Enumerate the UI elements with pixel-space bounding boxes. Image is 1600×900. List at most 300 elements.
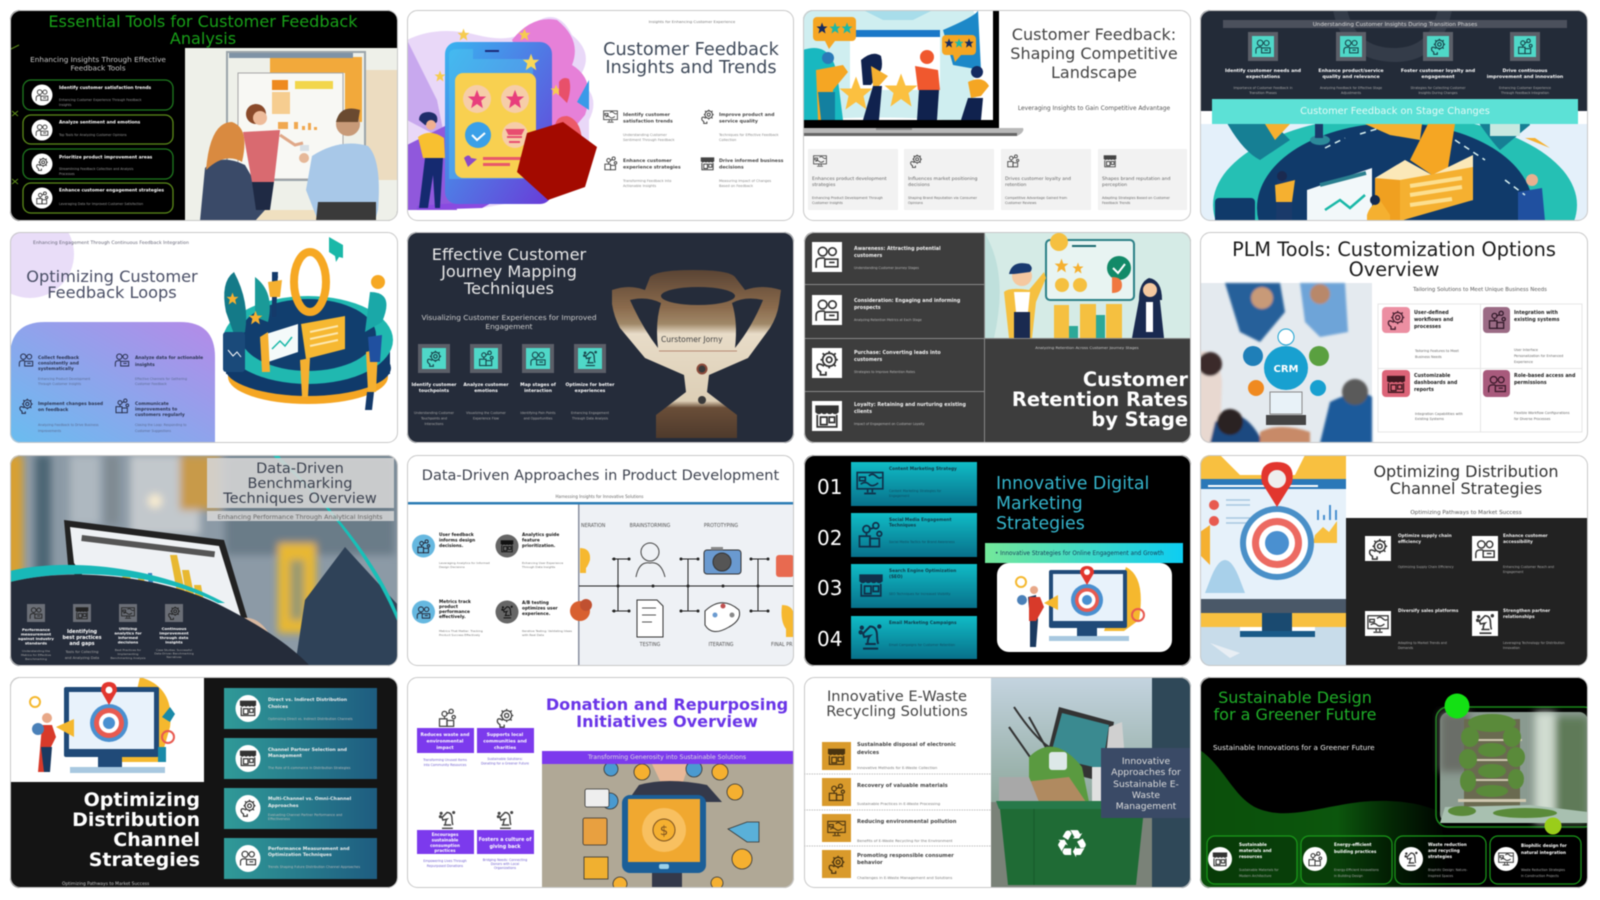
stage: purchase: Strategies to Improve Retention Rates	[854, 370, 915, 374]
title: by Stage	[1091, 408, 1188, 431]
card: sentiment and emotions: Top Tools for Analyzing Customer Opinions	[58, 133, 127, 137]
option: workflows: processes	[1414, 324, 1441, 330]
card: customer loyalty: Customer Reviews	[1005, 201, 1037, 205]
title: Initiatives Overview	[576, 712, 758, 731]
stage: awareness: Understanding Customer Journey Stages	[854, 266, 919, 270]
approach: A/B testing: with Real Data	[522, 633, 544, 637]
gradient panel with actions: insights	[135, 362, 155, 368]
dark options panel: Demands	[1398, 646, 1414, 650]
card: biophilic: in Construction Projects	[1521, 874, 1559, 878]
panel: Innovative Digital Marketing Strategies	[804, 455, 1192, 666]
callout box	[1101, 748, 1191, 818]
solution: consumer behavior: behavior	[857, 860, 883, 866]
title: for a Greener Future	[1214, 705, 1376, 724]
card: product development: Customer Insights	[812, 201, 843, 205]
card: materials: Modern Architecture	[1239, 874, 1272, 878]
metric: performance: Metrics for Effective	[21, 653, 51, 657]
item 01: Content Marketing Strategy	[889, 466, 957, 472]
step: product quality: Enhance product/service	[1318, 69, 1384, 74]
title box: Techniques Overview	[222, 491, 377, 507]
subtitle: Harnessing Insights for Innovative Solutions	[555, 494, 644, 499]
approach: metrics: Metrics track	[439, 600, 471, 605]
card: direct vs indirect: Optimizing Direct vs. Indirect Distribution Channels	[268, 717, 353, 721]
item 01	[817, 462, 977, 506]
callout box: Management	[1116, 801, 1177, 812]
card: customer loyalty: Drives customer loyalty and	[1005, 177, 1071, 182]
metric: improvement: Continuous	[162, 626, 186, 631]
approach: user feedback	[412, 532, 490, 569]
subtitle box: Enhancing Performance Through Analytical Insights	[218, 513, 383, 521]
metric: analytics	[110, 604, 146, 660]
title: Innovative E-Waste	[827, 688, 967, 705]
title: Feedback Loops	[47, 283, 177, 302]
metric: analytics: Best Practices for	[115, 648, 141, 652]
subtitle: Optimizing Pathways to Market Success	[1410, 510, 1522, 516]
feature: service quality: Techniques for Effective Feedback	[719, 133, 779, 137]
panel: Data-Driven Approaches in Product Development	[407, 455, 795, 666]
title: Overview	[1349, 258, 1439, 281]
dark options panel: Engagement	[1503, 570, 1524, 574]
callout box: Waste	[1132, 790, 1160, 801]
option: workflows	[1382, 307, 1459, 359]
title: Insights and Trends	[605, 58, 777, 78]
card: multi-channel: Multi-Channel vs. Omni-Channel	[268, 797, 351, 802]
card: direct vs indirect: Choices	[268, 704, 288, 710]
solution: disposal: devices	[857, 750, 879, 756]
step: customer needs: Transition Phases	[1248, 91, 1277, 95]
initiative: support communities: Sustainable Solutions:	[487, 757, 523, 761]
item 02: Social Media Engagement	[889, 518, 952, 523]
card: energy	[1301, 836, 1392, 884]
callout box: Approaches for	[1111, 767, 1181, 778]
card: waste	[1395, 836, 1486, 884]
approach: analytics	[496, 532, 563, 569]
metric: performance: Performance	[22, 627, 50, 632]
trophy photo cutout	[612, 270, 781, 438]
metric: performance	[18, 604, 54, 661]
stage: awareness	[812, 242, 941, 272]
item 02: Social Media Tactics for Brand Awareness	[889, 540, 955, 544]
metric: improvement: Case Studies: Successful	[156, 648, 192, 652]
card: biophilic: natural integration	[1521, 850, 1566, 855]
title: Data-Driven Approaches in Product Development	[422, 468, 780, 484]
card: biophilic	[1490, 836, 1581, 884]
feature: business decisions	[701, 158, 784, 188]
dark options panel: Optimizing Supply Chain Efficiency	[1398, 565, 1454, 569]
solution: recovery: Recovery of valuable materials	[857, 783, 948, 789]
panel: Customer Feedback Shaping Competitive Landscape	[803, 10, 1191, 221]
feature: business decisions: Drive informed business	[719, 159, 783, 164]
illustration: analysts and dashboard	[984, 232, 1191, 338]
trophy photo cutout: Curstomer Jorny	[661, 335, 723, 344]
metric: analytics: informed	[118, 635, 138, 640]
panel: Effective Customer Journey Mapping Techniques	[407, 232, 795, 443]
item 04	[817, 616, 977, 659]
photo: CRM meeting: CRM	[1274, 364, 1299, 375]
gradient panel with actions	[10, 322, 215, 443]
card: materials: Sustainable	[1239, 842, 1267, 847]
dark options panel: relationships	[1503, 614, 1535, 620]
feature: service quality	[702, 110, 780, 142]
gradient panel with actions: customers regularly	[135, 412, 185, 418]
stage: consideration: Consideration: Engaging and informing	[854, 299, 960, 304]
title box: Benchmarking	[247, 476, 353, 492]
dark options panel: Enhance customer	[1503, 534, 1548, 539]
card: direct vs indirect	[224, 688, 377, 729]
title: Analysis	[170, 29, 236, 48]
card: channel partner: Channel Partner Selection and	[268, 748, 347, 753]
solution: disposal: Innovative Methods for E-Waste Collection	[857, 765, 938, 770]
option: dashboards	[1382, 370, 1463, 421]
metric: improvement: insights	[165, 640, 183, 644]
step: customer loyalty: Strategies for Collecting Customer	[1410, 86, 1466, 90]
card: brand reputation	[1098, 149, 1187, 210]
callout box: Sustainable E-	[1113, 779, 1179, 790]
initiative: sustainable consumption: sustainable	[432, 838, 459, 842]
initiative: support communities	[477, 709, 534, 766]
title band: Customer Feedback on Stage Changes	[1300, 106, 1490, 117]
card: customer engagement: Enhance customer engagement strategies	[59, 188, 164, 194]
solution: pollution	[822, 814, 957, 843]
initiative: reduce waste: impact	[436, 745, 455, 751]
initiative: sustainable consumption: Repurposed Donations	[427, 864, 463, 868]
header strip	[1223, 20, 1567, 28]
callout band	[985, 543, 1183, 563]
card: satisfaction trends: Enhancing Customer Experience Through Feedback	[59, 98, 141, 102]
option: workflows: Tailoring Features to Meet	[1415, 349, 1459, 353]
metric: best practices: and Analyzing Data	[65, 656, 99, 660]
metric: improvement: Narratives	[167, 655, 182, 659]
process diagram: TESTING	[639, 642, 661, 648]
metric: analytics: decisions	[118, 640, 139, 644]
initiative: culture of giving: Donors with Local	[491, 862, 519, 866]
card: multi-channel: Evaluating Channel Partner Performance and	[268, 813, 342, 817]
gradient panel with actions: on feedback	[38, 407, 68, 413]
dark options panel: Leveraging Technology for Distribution	[1503, 641, 1565, 645]
step: product quality: Adjustments	[1341, 91, 1361, 95]
stage: awareness: Awareness: Attracting potential	[854, 247, 941, 252]
feature: service quality: service quality	[719, 118, 758, 124]
metric: performance: Benchmarking	[25, 657, 47, 661]
card: performance measurement: Optimization Techniques	[268, 852, 332, 858]
step: touchpoints: touchpoints	[419, 388, 449, 394]
title: Retention Rates	[1012, 388, 1188, 411]
stage: consideration: prospects	[854, 305, 881, 311]
panel: Optimizing Customer Feedback Loops	[10, 232, 394, 444]
title: Essential Tools for Customer Feedback	[48, 12, 358, 31]
approach: analytics: Through Data Insights	[521, 565, 556, 569]
initiative: reduce waste: into Community Resources	[424, 763, 467, 767]
panel: PLM Tools Customization Options Overview	[1198, 232, 1588, 443]
photo: tablet in warehouse	[5, 455, 398, 666]
title: PLM Tools: Customization Options	[1232, 238, 1556, 261]
callout box: Innovative	[1122, 756, 1170, 767]
card: materials: resources	[1239, 854, 1263, 859]
solution: consumer behavior	[822, 850, 954, 880]
step: customer needs: Importance of Customer Feedback in	[1234, 86, 1292, 90]
stage: loyalty	[812, 401, 966, 431]
option: workflows: User-defined	[1414, 311, 1449, 316]
approach: user feedback: User feedback	[439, 533, 474, 538]
step: product quality: Analyzing Feedback for Effective Stage	[1320, 86, 1382, 90]
item 02	[817, 513, 977, 557]
step: touchpoints	[411, 344, 457, 426]
card: biophilic: Waste Reduction Strategies	[1521, 868, 1565, 872]
option: integration: Integration with	[1514, 311, 1558, 316]
approach: metrics	[412, 599, 483, 637]
subtitle: Leveraging Insights to Gain Competitive Advantage	[1018, 106, 1170, 112]
initiative: culture of giving: Bridging Needs: Connecting	[483, 858, 527, 862]
title: Channel	[113, 829, 200, 851]
title: Customer Feedback	[603, 40, 779, 60]
stage: consideration	[812, 295, 961, 325]
stage: purchase: customers	[854, 357, 882, 363]
metric: best practices: best practices	[62, 635, 102, 641]
title: Effective Customer	[432, 245, 586, 264]
gradient panel with actions: Collect feedback	[38, 356, 79, 361]
dark options panel: Optimize supply chain	[1398, 534, 1452, 539]
title band	[1212, 99, 1578, 124]
card: sentiment and emotions: Analyze sentiment and emotions	[59, 120, 141, 126]
option: access: Role-based access and	[1514, 374, 1575, 379]
option: workflows: workflows and	[1414, 317, 1454, 323]
card: product improvement	[23, 149, 173, 179]
stage: consideration: Analyzing Retention Metrics at Each Stage	[854, 318, 922, 322]
option: workflows: Business Needs	[1415, 355, 1442, 359]
option: integration: Experience	[1514, 360, 1533, 364]
approach: user feedback: informs design	[439, 538, 475, 544]
approach: A/B testing: optimizes user	[522, 606, 559, 612]
gradient panel with actions: Implement changes based	[38, 402, 103, 407]
feature: satisfaction trends	[604, 111, 675, 142]
stage: loyalty: clients	[854, 409, 872, 415]
step: customer needs: expectations	[1246, 74, 1280, 80]
feature: satisfaction trends: Sentiment Through Feedback	[623, 138, 675, 142]
item 04: 04	[817, 627, 842, 651]
approach: analytics: feature	[522, 538, 540, 544]
feature: satisfaction trends: satisfaction trends	[623, 118, 673, 124]
stage: loyalty: Impact of Engagement on Customer Loyalty	[854, 422, 925, 426]
dark options panel: Innovation	[1503, 646, 1520, 650]
metric: performance: Understanding the	[22, 649, 50, 653]
title: Landscape	[1051, 63, 1137, 82]
gradient panel with actions: consistently and	[38, 360, 79, 366]
card: product development: Enhancing Product Development Through	[812, 196, 883, 200]
initiative: reduce waste: environmental	[427, 738, 464, 744]
metric: improvement: through data	[160, 635, 189, 640]
footer note: Optimizing Pathways to Market Success	[62, 881, 150, 887]
title box	[207, 458, 394, 508]
approach: analytics: Analytics guide	[522, 533, 559, 538]
card: channel partner	[224, 738, 377, 779]
initiative: culture of giving	[477, 812, 534, 870]
card: customer engagement	[23, 183, 173, 213]
panel: Customer Feedback on Stage Changes	[1200, 10, 1588, 221]
step: product quality	[1318, 32, 1384, 95]
title: Shaping Competitive	[1010, 44, 1178, 63]
process diagram: ITERATING	[708, 642, 734, 648]
option: access: permissions	[1514, 380, 1547, 386]
title: Strategies	[89, 849, 200, 871]
band	[542, 751, 794, 764]
stage: purchase: Purchase: Converting leads into	[854, 351, 941, 356]
step: customer loyalty: Insights During Changes	[1418, 91, 1458, 95]
feature: experience strategies: experience strategies	[623, 164, 681, 170]
panel: Innovative E-Waste Recycling Solutions	[804, 677, 1192, 888]
gradient panel with actions: Through Customer Insights	[37, 382, 82, 386]
item 02: 02	[817, 526, 842, 550]
card: brand reputation: Shapes brand reputation and	[1102, 177, 1170, 182]
item 04: Email Marketing Campaigns	[889, 620, 957, 626]
initiative: reduce waste	[417, 709, 474, 767]
kicker: Analyzing Retention Across Customer Journey Stages	[1035, 345, 1139, 350]
metric: analytics: Implementing	[118, 652, 139, 656]
card: energy: in Building Design	[1334, 874, 1363, 878]
solution: pollution: Benefits of E-Waste Recycling for the Environment	[857, 838, 953, 843]
metric: best practices: Identifying	[67, 629, 97, 635]
step: product quality: quality and relevance	[1322, 74, 1380, 80]
card: performance measurement	[224, 838, 377, 879]
metric: performance: measurement	[21, 632, 51, 636]
process diagram	[570, 504, 794, 666]
subtitle: Tailoring Solutions to Meet Unique Business Needs	[1412, 287, 1547, 293]
approach: user feedback: decisions.	[439, 543, 464, 549]
photo: green tower	[1436, 707, 1596, 827]
illustration: e-waste bin: ♻	[1055, 822, 1089, 866]
title: Recycling Solutions	[826, 703, 968, 720]
stage: loyalty: Loyalty: Retaining and nurturing existing	[854, 403, 966, 408]
card: materials: Sustainable Materials for	[1239, 868, 1279, 872]
approach: A/B testing: A/B testing	[522, 601, 549, 606]
title: Donation and Repurposing	[546, 695, 788, 714]
initiative: culture of giving: Fosters a culture of	[479, 838, 531, 843]
step: continuous improvement	[1487, 32, 1563, 95]
accent circle green	[1444, 694, 1470, 718]
step: continuous improvement: Through Feedback Integration	[1500, 91, 1549, 95]
card: market positioning: Shaping Brand Reputation via Consumer	[908, 196, 977, 200]
title: Strategies	[996, 514, 1085, 534]
step: interaction stages: Map stages of	[520, 383, 556, 388]
card: waste: Waste reduction	[1428, 842, 1467, 847]
approach: analytics: prioritization.	[522, 543, 556, 549]
step: emotions: Visualizing the Customer	[466, 411, 506, 415]
gradient panel with actions: Enhancing Product Development	[38, 377, 90, 381]
hexagon accent	[517, 122, 597, 200]
title: Optimizing Distribution	[1373, 462, 1559, 481]
subtitle: Visualizing Customer Experiences for Improved	[421, 313, 597, 322]
title box: Data-Driven	[256, 461, 344, 477]
item 03: SEO Techniques for Increased Visibility	[889, 592, 951, 596]
title: Customer	[1083, 368, 1188, 391]
card: market positioning: Influences market positioning	[908, 177, 977, 182]
approach: metrics: performance	[439, 609, 470, 615]
initiative: culture of giving: Organizations	[494, 866, 516, 870]
illustration: large target monitor	[1200, 455, 1346, 666]
approach: user feedback: Leveraging Analytics for Informed	[439, 561, 490, 565]
illustration: donation tablet and coins	[542, 761, 794, 891]
feature: experience strategies: Actionable Insights	[623, 184, 656, 188]
card: performance measurement: Performance Measurement and	[268, 847, 350, 852]
step: better experiences: Optimize for better	[566, 383, 614, 388]
feature: experience strategies: Transforming Feedback into	[623, 179, 671, 183]
illustration: team at whiteboard	[185, 48, 398, 221]
initiative: sustainable consumption: practices	[434, 848, 456, 853]
option: integration: Personalization for Enhanced	[1514, 354, 1563, 358]
card: multi-channel: Effectiveness	[268, 817, 290, 821]
approach: metrics: Product Success Effectively	[439, 633, 480, 637]
illustration: feedback platform	[1200, 123, 1588, 221]
card: satisfaction trends: Insights	[59, 103, 72, 107]
card: waste: strategies	[1428, 854, 1452, 859]
step: better experiences	[566, 344, 615, 420]
metric: improvement	[154, 604, 194, 659]
title: Techniques	[463, 279, 554, 298]
initiative: sustainable consumption: Empowering Lives Through	[423, 859, 467, 863]
initiative: support communities: Donating for a Greener Future	[481, 762, 529, 766]
dark options panel: Adapting to Market Trends and	[1398, 641, 1447, 645]
initiative: reduce waste: Reduces waste and	[420, 733, 470, 738]
illustration: feedback loop platform	[223, 237, 393, 410]
title: Journey Mapping	[440, 262, 577, 281]
gradient panel with actions: Improvements	[38, 429, 61, 433]
step: customer needs	[1225, 32, 1301, 95]
step: interaction stages: Identifying Pain Points	[520, 411, 556, 415]
step: interaction stages: interaction	[524, 388, 552, 394]
gradient panel with actions: systematically	[38, 366, 74, 372]
approach: A/B testing: experience.	[522, 611, 551, 617]
item 03	[817, 564, 977, 608]
option: dashboards: Customizable	[1414, 374, 1450, 379]
option: access	[1483, 370, 1576, 421]
item 02: Techniques	[889, 522, 916, 528]
stage: purchase	[812, 348, 941, 378]
card: product development: strategies	[812, 182, 836, 188]
option: access: Flexible Workflow Configurations	[1514, 411, 1570, 415]
solution: consumer behavior: Promoting responsible consumer	[857, 853, 954, 859]
panel: Data-Driven Benchmarking Techniques Overview	[5, 455, 398, 666]
card: brand reputation: Adapting Strategies Based on Customer	[1102, 196, 1170, 200]
panel: Customer Feedback Insights and Trends	[407, 16, 784, 211]
process diagram: NERATION	[581, 523, 606, 529]
subtitle: Sustainable Innovations for a Greener Future	[1213, 743, 1375, 752]
gradient panel with actions: Analyzing Feedback to Drive Business	[38, 423, 99, 427]
option: access: for Diverse Processes	[1514, 417, 1551, 421]
solution: disposal: Sustainable disposal of electronic	[857, 742, 956, 748]
item 03: Search Engine Optimization	[889, 569, 956, 574]
card: product development	[808, 149, 898, 210]
subtitle: Enhancing Insights Through Effective	[30, 55, 166, 64]
feature: service quality: Improve product and	[719, 113, 774, 118]
card: energy: building practices	[1334, 849, 1377, 854]
header strip: Understanding Customer Insights During Transition Phases	[1313, 22, 1477, 28]
solution: recovery	[822, 778, 948, 806]
title: Optimizing Customer	[26, 267, 198, 286]
option: integration: User Interface	[1514, 348, 1538, 352]
card: brand reputation: perception	[1102, 182, 1127, 188]
step: emotions: Experience Flow	[473, 416, 499, 420]
card: waste: Biophilic Design: Nature-	[1428, 868, 1468, 872]
step: customer loyalty: engagement	[1421, 74, 1455, 80]
initiative: support communities: Supports local	[487, 733, 523, 738]
item 03: (SEO)	[889, 574, 903, 580]
panel: Essential Tools for Customer Feedback Analysis	[10, 10, 398, 221]
card: multi-channel: Approaches	[268, 803, 299, 809]
item 01: 01	[817, 475, 842, 499]
metric: performance: standards	[25, 640, 48, 646]
metric: improvement: improvement	[159, 630, 189, 636]
solution: pollution: Reducing environmental pollution	[857, 819, 957, 825]
initiative: culture of giving: giving back	[489, 844, 521, 850]
